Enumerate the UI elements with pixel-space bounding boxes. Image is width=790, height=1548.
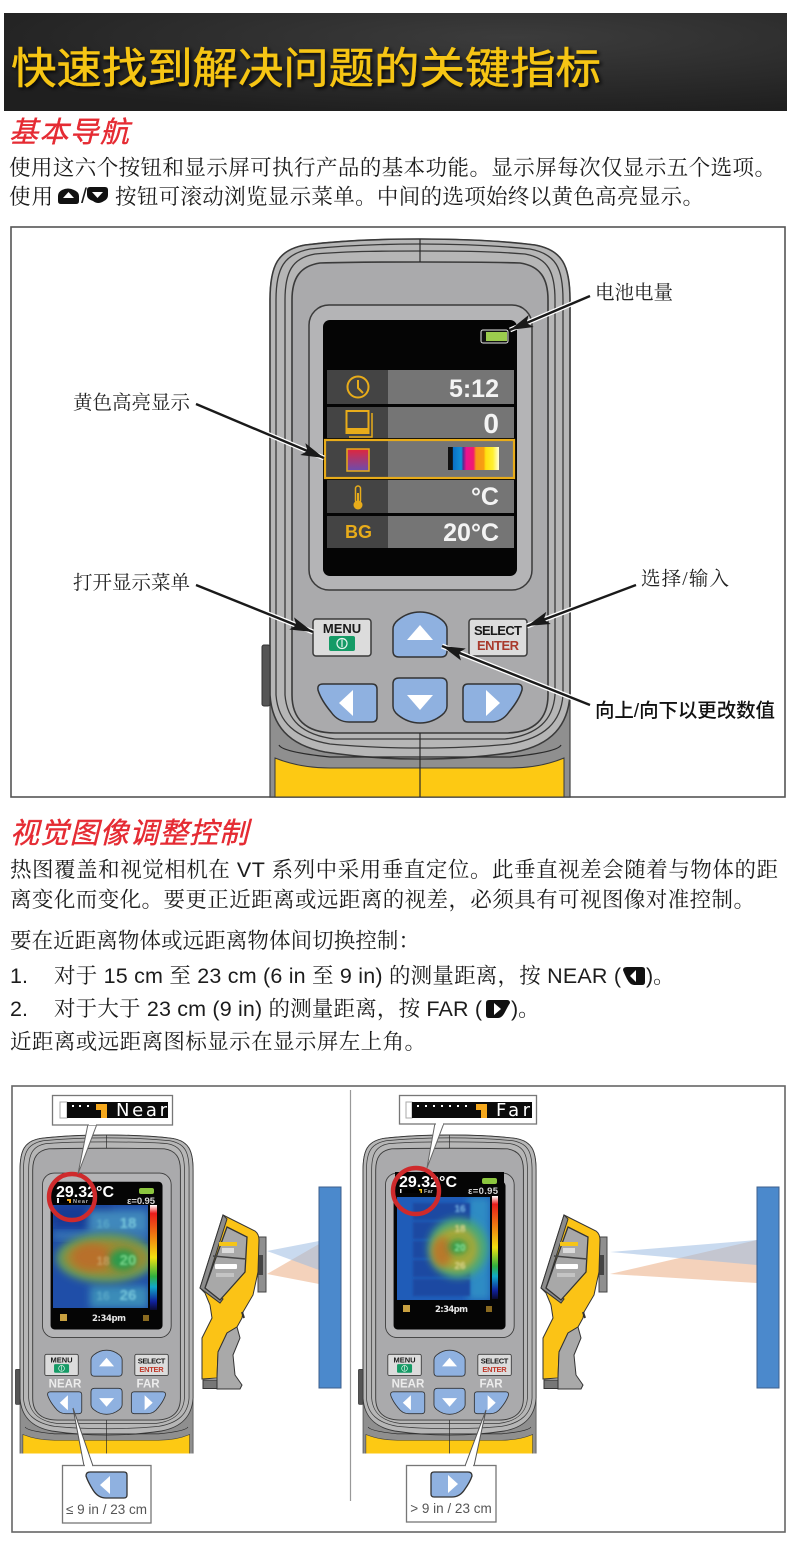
label and arrow: select enter: 选择/输入 — [641, 568, 729, 590]
target wall: far — [757, 1187, 779, 1388]
menu row: images: 0 — [483, 408, 499, 439]
select enter button label — [474, 623, 522, 653]
device: near mode: NEAR — [49, 1379, 82, 1391]
list item 1: )。 — [646, 964, 675, 988]
heading: visual image adjustment: 视觉图像调整控制 — [10, 818, 252, 850]
label and arrow: up down: 向上/向下以更改数值 — [595, 700, 775, 722]
callout: far scale: Far — [496, 1100, 531, 1121]
thermal image: near: 2:34pm — [92, 1314, 126, 1324]
panel: basic navigation diagram — [11, 227, 785, 797]
thermal image: near: Near — [73, 1199, 89, 1205]
handheld camera: far — [541, 1215, 607, 1389]
label and arrow: yellow highlight: 黄色高亮显示 — [73, 392, 190, 414]
thermal image: far: 29.32°C — [399, 1174, 457, 1191]
thermal image: far: 18 — [454, 1224, 466, 1235]
device: near mode: ENTER — [139, 1365, 164, 1374]
menu row: palette highlighted — [325, 440, 514, 478]
handheld camera: near — [200, 1215, 266, 1389]
menu row: time — [327, 370, 514, 404]
menu row: images — [327, 407, 514, 439]
label and arrow: battery: 电池电量 — [595, 282, 673, 304]
thermal image: near: ε=0.95 — [127, 1196, 156, 1207]
label and arrow: select enter — [527, 568, 729, 626]
callout: near button: ≤ 9 in / 23 cm — [66, 1502, 147, 1517]
heading: basic navigation: 基本导航 — [9, 117, 133, 149]
thermal image: near: 29.32°C — [56, 1184, 114, 1201]
label and arrow: open menu — [73, 572, 313, 632]
text block: parallax explanation: 离变化而变化。要更正近距离或远距离的视差，必须具有可视图像对准控制。 — [10, 888, 755, 913]
text block: navigation intro: / — [81, 184, 87, 208]
thermal image: far: 26 — [454, 1261, 466, 1272]
label and arrow: battery — [510, 282, 673, 330]
list item 1: 1. — [10, 964, 28, 988]
device: near mode — [15, 1135, 193, 1457]
label and arrow: open menu: 打开显示菜单 — [73, 572, 190, 594]
thermal image: near: 16 — [96, 1217, 110, 1231]
device: far mode: MENU — [393, 1355, 416, 1364]
red circle: far indicator — [393, 1168, 439, 1214]
text block: icon location: 近距离或远距离图标显示在显示屏左上角。 — [10, 1030, 426, 1054]
label and arrow: up down — [442, 646, 775, 722]
text block: parallax explanation — [10, 858, 778, 953]
select enter button label: ENTER — [477, 638, 520, 653]
list item 2: 2. — [10, 997, 28, 1021]
device: far mode: FAR — [480, 1379, 503, 1391]
thermal image: far: 20 — [454, 1243, 466, 1254]
callout: near scale — [52, 1096, 172, 1174]
text block: navigation intro: 使用这六个按钮和显示屏可执行产品的基本功能。显示屏每次仅显示五个选项。 — [9, 156, 776, 180]
header banner — [4, 13, 787, 111]
device: near mode: FAR — [137, 1379, 160, 1391]
menu row: units — [327, 480, 514, 513]
thermal image: near: 18 — [120, 1215, 136, 1232]
beams: far — [610, 1240, 757, 1283]
callout: far button — [406, 1410, 496, 1522]
callout: near scale: Near — [116, 1100, 168, 1121]
thermal image: far: 16 — [454, 1204, 466, 1215]
device: far mode: NEAR — [392, 1379, 425, 1391]
device: far mode: SELECT — [481, 1356, 509, 1365]
menu row: background: 20°C — [443, 519, 499, 547]
menu row: units: °C — [471, 483, 499, 511]
red circle: near indicator — [49, 1174, 95, 1220]
text block: parallax explanation: 热图覆盖和视觉相机在 VT 系列中采用垂直定位。此垂直视差会随着与物体的距 — [10, 858, 778, 882]
select enter button label: SELECT — [474, 623, 522, 638]
text block: parallax explanation: 要在近距离物体或远距离物体间切换控制： — [10, 929, 420, 953]
thermal image: near: 18 — [96, 1254, 110, 1268]
list item 2: 对于大于 23 cm (9 in) 的测量距离，按 FAR ( — [54, 997, 483, 1022]
thermal image: near: 20 — [120, 1252, 136, 1269]
thermal image: far: ε=0.95 — [468, 1186, 499, 1197]
beams: near — [267, 1241, 319, 1284]
text block: navigation intro — [9, 156, 776, 209]
callout: far scale — [400, 1096, 536, 1168]
label and arrow: yellow highlight — [73, 392, 324, 458]
menu row: background — [327, 516, 514, 548]
thermal image: far — [395, 1172, 504, 1315]
battery icon — [481, 330, 508, 343]
menu row: background: BG — [345, 522, 372, 542]
thermal image: near: 16 — [96, 1289, 110, 1303]
panel: near far diagram — [12, 1086, 785, 1532]
thermal image: near — [53, 1184, 157, 1324]
title: 快速找到解决问题的关键指标 — [11, 46, 601, 93]
device: far mode: ENTER — [482, 1365, 507, 1374]
callout: far button: > 9 in / 23 cm — [410, 1501, 492, 1516]
target wall: near — [319, 1187, 341, 1388]
thermal image: near: 26 — [120, 1287, 136, 1304]
thermal image: far: Far — [424, 1189, 434, 1195]
menu row: time: 5:12 — [449, 375, 499, 403]
menu button label: MENU — [323, 621, 361, 636]
device: near mode: SELECT — [138, 1356, 166, 1365]
device: far mode — [358, 1135, 536, 1457]
device: main thermal camera — [262, 239, 570, 797]
text block: navigation intro: 按钮可滚动浏览显示菜单。中间的选项始终以黄色高亮显示。 — [115, 185, 704, 209]
callout: near button — [62, 1408, 151, 1523]
list item 2: )。 — [511, 997, 540, 1021]
list item 1: 对于 15 cm 至 23 cm (6 in 至 9 in) 的测量距离，按 NEAR ( — [54, 964, 622, 989]
thermal image: far: 2:34pm — [435, 1305, 468, 1315]
device: near mode: MENU — [50, 1355, 73, 1364]
text block: navigation intro: 使用 — [9, 185, 53, 209]
